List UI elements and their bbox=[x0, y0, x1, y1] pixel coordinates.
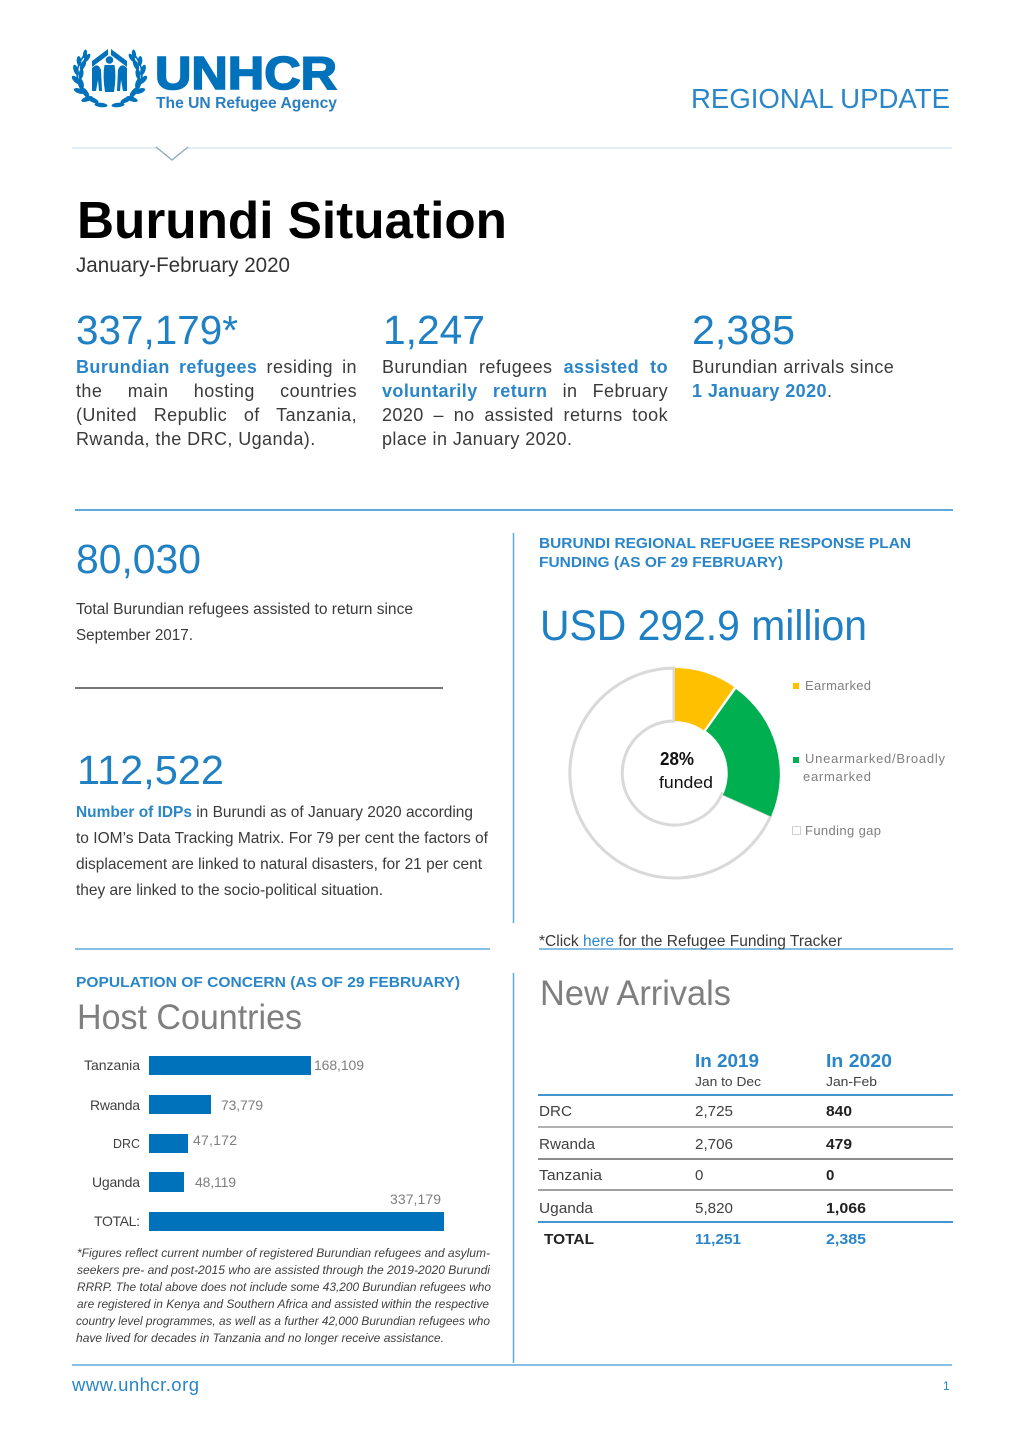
text: refugees in hosting countries bbox=[76, 357, 357, 449]
bar values bbox=[193, 1057, 441, 1207]
footnote: RRRP. The total above does not include some 43,200 Burundian refugees who bbox=[77, 1282, 492, 1294]
row: Rwanda: 479 bbox=[826, 1136, 852, 1153]
bar values: 337,179 bbox=[390, 1191, 441, 1207]
text: returns since 2017: Total Burundian refugees assisted to return since bbox=[76, 601, 413, 618]
legend item: unearmarked: Unearmarked/Broadly bbox=[805, 751, 946, 766]
logo tagline: The UN Refugee Agency bbox=[156, 95, 337, 112]
bar values: 48,119 bbox=[195, 1174, 236, 1190]
legend item: unearmarked: earmarked bbox=[803, 769, 871, 784]
bar labels: Rwanda bbox=[90, 1097, 140, 1113]
legend: funding bbox=[792, 678, 946, 838]
bar chart: host countries bbox=[84, 1056, 444, 1231]
donut chart: funding bbox=[570, 668, 780, 878]
row: Tanzania bbox=[539, 1167, 834, 1184]
bar labels: DRC bbox=[113, 1136, 140, 1151]
icon: UNHCR emblem bbox=[70, 49, 149, 108]
row: total: 11,251 bbox=[695, 1231, 741, 1248]
logo wordmark: UNHCR bbox=[155, 47, 337, 99]
row: total: TOTAL bbox=[544, 1231, 594, 1248]
text: new arrivals since January: Burundian arrivals since bbox=[692, 357, 894, 377]
heading: funding bbox=[539, 535, 911, 571]
row: Tanzania: 0 bbox=[826, 1167, 834, 1184]
text: assisted returns: place in January 2020. bbox=[382, 429, 572, 449]
segment: earmarked bbox=[675, 668, 734, 730]
footer: page number: 1 bbox=[943, 1379, 950, 1393]
legend item: earmarked: Earmarked bbox=[805, 678, 871, 693]
footnote: have lived for decades in Tanzania and no longer receive assistance. bbox=[76, 1333, 444, 1345]
text: IDPs: they are linked to the socio-political situation. bbox=[76, 882, 383, 899]
heading: funding: FUNDING (AS OF 29 FEBRUARY) bbox=[539, 554, 783, 571]
text: assisted returns: 2020 – no assisted returns took bbox=[382, 405, 668, 425]
bars bbox=[149, 1056, 444, 1231]
footnote: *Figures reflect current number of registered Burundian refugees and asylum- bbox=[77, 1248, 490, 1260]
text: IDPs: to IOM’s Data Tracking Matrix. For 79 per cent the factors of bbox=[76, 830, 489, 847]
row: Uganda: Uganda bbox=[539, 1200, 594, 1217]
stat: 112,522: 112,522 bbox=[77, 747, 224, 793]
stat: 337,179: 337,179* bbox=[76, 307, 238, 353]
text: assisted returns bbox=[382, 357, 668, 449]
donut centre label bbox=[659, 749, 713, 792]
text: assisted returns: voluntarily return in February bbox=[382, 381, 668, 401]
title: Burundi Situation bbox=[77, 192, 507, 250]
heading: population of concern: POPULATION OF CONCERN (AS OF 29 FEBRUARY) bbox=[76, 974, 460, 991]
logo: UNHCR bbox=[70, 47, 337, 112]
heading: host countries: Host Countries bbox=[77, 998, 302, 1037]
heading: funding: BURUNDI REGIONAL REFUGEE RESPONSE PLAN bbox=[539, 535, 911, 552]
row: DRC: 2,725 bbox=[695, 1103, 733, 1120]
row: Rwanda: 2,706 bbox=[695, 1136, 733, 1153]
bar labels: Tanzania bbox=[84, 1057, 140, 1073]
text: refugees in hosting countries: the main hosting countries bbox=[76, 381, 357, 401]
bar values: 73,779 bbox=[221, 1097, 263, 1113]
row: DRC: 840 bbox=[826, 1103, 852, 1120]
text: refugees in hosting countries: Burundian refugees residing in bbox=[76, 357, 357, 377]
text: new arrivals since January bbox=[692, 357, 894, 401]
text: IDPs bbox=[76, 804, 489, 899]
bar values: 47,172 bbox=[193, 1132, 237, 1148]
text: assisted returns: Burundian refugees assisted to bbox=[382, 357, 668, 377]
legend item: funding gap: Funding gap bbox=[805, 823, 881, 838]
text: IDPs: Number of IDPs in Burundi as of January 2020 according bbox=[76, 804, 473, 821]
stat: 1,247: 1,247 bbox=[383, 307, 485, 353]
row: Tanzania: Tanzania bbox=[539, 1167, 603, 1184]
funding tracker link: *Click here for the Refugee Funding Tracker bbox=[539, 933, 842, 950]
bar labels: Uganda bbox=[92, 1174, 140, 1190]
footer: website: www.unhcr.org bbox=[71, 1374, 199, 1395]
row: total bbox=[544, 1231, 866, 1248]
row: Rwanda bbox=[539, 1136, 852, 1153]
table header: In 2019 bbox=[695, 1050, 759, 1071]
row: Uganda: 5,820 bbox=[695, 1200, 733, 1217]
bar values: 168,109 bbox=[314, 1057, 364, 1073]
segment: unearmarked bbox=[706, 689, 780, 816]
row: Uganda: 1,066 bbox=[826, 1200, 866, 1217]
text: returns since 2017 bbox=[76, 601, 413, 644]
table: new arrivals bbox=[538, 1050, 953, 1248]
bar labels bbox=[84, 1057, 140, 1229]
subtitle: date: January-February 2020 bbox=[76, 254, 290, 277]
heading: new arrivals: New Arrivals bbox=[540, 974, 731, 1013]
text: refugees in hosting countries: Rwanda, the DRC, Uganda). bbox=[76, 429, 316, 449]
legend item: unearmarked bbox=[793, 751, 946, 784]
donut centre label: 28% bbox=[660, 749, 694, 769]
donut centre label: funded bbox=[659, 773, 713, 792]
segment: funding gap bbox=[570, 668, 771, 878]
stat: 80,030: 80,030 bbox=[76, 536, 201, 582]
footnote bbox=[76, 1248, 492, 1345]
table header: Jan to Dec bbox=[695, 1074, 762, 1089]
row: Uganda bbox=[539, 1200, 866, 1217]
row: DRC: DRC bbox=[539, 1103, 572, 1120]
text: refugees in hosting countries: (United Republic of Tanzania, bbox=[76, 405, 357, 425]
text: new arrivals since January: 1 January 2020. bbox=[692, 381, 832, 401]
stat: 2,385: 2,385 bbox=[692, 307, 795, 353]
document type label: REGIONAL UPDATE bbox=[691, 83, 950, 114]
row: DRC bbox=[539, 1103, 852, 1120]
row: Rwanda: Rwanda bbox=[539, 1136, 596, 1153]
table header bbox=[695, 1050, 892, 1089]
table header: Jan-Feb bbox=[826, 1074, 877, 1089]
row: total: 2,385 bbox=[826, 1231, 866, 1248]
footnote: seekers pre- and post-2015 who are assisted through the 2019-2020 Burundi bbox=[77, 1265, 490, 1277]
row: Tanzania: 0 bbox=[695, 1167, 703, 1184]
text: IDPs: displacement are linked to natural disasters, for 21 per cent bbox=[76, 856, 483, 873]
footnote: are registered in Kenya and Southern Africa and assisted within the respective bbox=[77, 1299, 489, 1311]
text: returns since 2017: September 2017. bbox=[76, 627, 193, 644]
funding amount: USD 292.9 million bbox=[540, 602, 867, 650]
footnote: country level programmes, as well as a further 42,000 Burundian refugees who bbox=[76, 1316, 491, 1328]
bar labels: TOTAL: bbox=[94, 1213, 140, 1229]
header rule with chevron bbox=[72, 147, 952, 160]
table header: In 2020 bbox=[826, 1050, 892, 1071]
